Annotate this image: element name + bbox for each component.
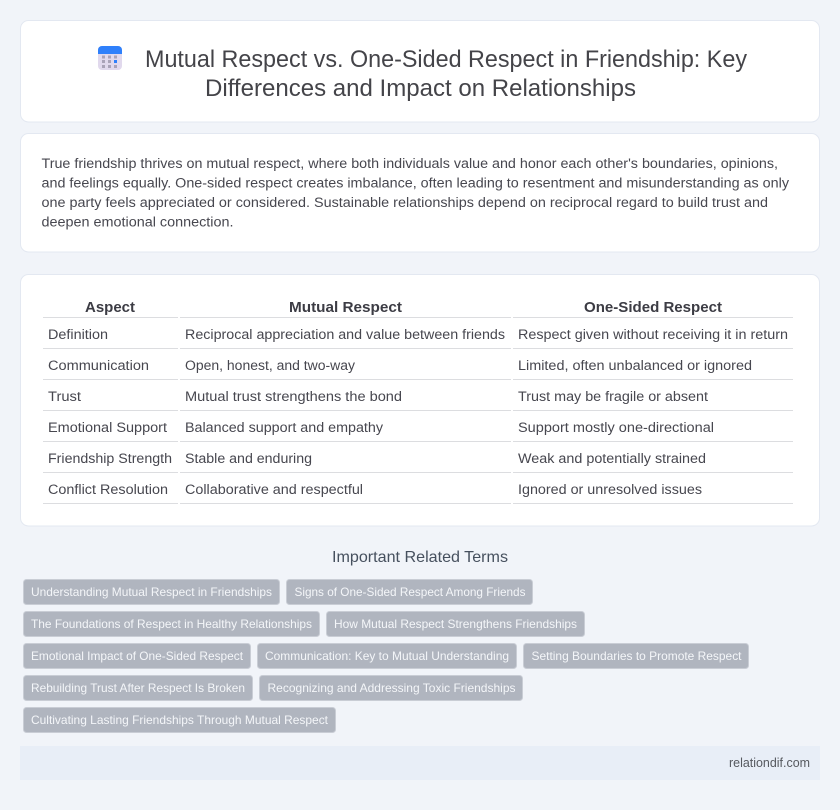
intro text block: True friendship thrives on mutual respect, where both individuals value and honor each other's boundaries, opinions,: [42, 156, 778, 172]
tag: foundations of respect: The Foundations of Respect in Healthy Relationships: [31, 617, 312, 631]
row: friendship strength: [43, 451, 793, 473]
row: trust: [43, 389, 793, 411]
row: friendship strength: Stable and enduring: [185, 451, 312, 467]
table header row: One-Sided Respect: [584, 300, 722, 316]
heading: important related terms: Important Related Terms: [332, 549, 508, 566]
row: emotional support: Balanced support and empathy: [185, 420, 384, 436]
tag: rebuilding trust: Rebuilding Trust After Respect Is Broken: [31, 681, 245, 695]
footer: relationdif.com: [729, 756, 810, 770]
tag: setting boundaries: Setting Boundaries to Promote Respect: [532, 649, 742, 663]
title: Mutual Respect vs. One-Sided Respect in Friendship: Key: [145, 46, 747, 73]
panel: comparison table: [20, 274, 820, 526]
row: emotional support: [43, 420, 793, 442]
tag: communication: Communication: Key to Mutual Understanding: [265, 649, 509, 663]
footer: [20, 746, 820, 780]
row: conflict resolution: Collaborative and respectful: [185, 482, 363, 498]
tag: cultivating lasting friendships: Cultivating Lasting Friendships Through Mutual Respect: [31, 713, 329, 727]
intro text block: deepen emotional connection.: [42, 214, 234, 230]
tag: signs of one-sided respect: Signs of One-Sided Respect Among Friends: [294, 585, 526, 599]
icon: calendar: [98, 46, 122, 70]
row: definition: Respect given without receiving it in return: [518, 327, 788, 343]
tag: how mutual respect strengthens: [326, 612, 584, 636]
tag: toxic friendships: Recognizing and Addressing Toxic Friendships: [268, 681, 516, 695]
row: emotional support: Support mostly one-directional: [518, 420, 714, 436]
tag: understanding mutual respect: Understanding Mutual Respect in Friendships: [31, 585, 272, 599]
title: [145, 46, 747, 102]
row: friendship strength: Weak and potentially strained: [518, 451, 706, 467]
table header row: Aspect: [85, 300, 135, 316]
row: conflict resolution: Conflict Resolution: [48, 482, 168, 498]
tag: understanding mutual respect: [24, 580, 280, 604]
row: definition: Reciprocal appreciation and value between friends: [185, 327, 505, 343]
panel: introduction: [20, 134, 820, 252]
intro text block: one party feels appreciated or considered. Sustainable relationships depend on reciprocal regard to build trust and: [42, 195, 768, 211]
tag: emotional impact: [24, 644, 250, 668]
row: definition: Definition: [48, 327, 108, 343]
row: communication: Open, honest, and two-way: [185, 358, 356, 374]
row: communication: Communication: [48, 358, 149, 374]
intro text block: and feelings equally. One-sided respect creates imbalance, often leading to resentment and misunderstanding as only: [42, 176, 790, 192]
tag: toxic friendships: [260, 676, 522, 700]
tag: communication: [258, 644, 516, 668]
row: trust: Trust: [48, 389, 81, 405]
row: conflict resolution: Ignored or unresolved issues: [518, 482, 702, 498]
tag: signs of one-sided respect: [286, 580, 532, 604]
row: conflict resolution: [43, 482, 793, 504]
tag: how mutual respect strengthens: How Mutual Respect Strengthens Friendships: [334, 617, 577, 631]
row: trust: Mutual trust strengthens the bond: [185, 389, 402, 405]
tag: rebuilding trust: [24, 676, 252, 700]
row: definition: [43, 327, 793, 349]
row: communication: Limited, often unbalanced or ignored: [518, 358, 752, 374]
tag: setting boundaries: [524, 644, 748, 668]
table header row: Mutual Respect: [289, 300, 402, 316]
row: emotional support: Emotional Support: [48, 420, 167, 436]
table header row: [43, 300, 793, 318]
intro text block: [42, 156, 790, 230]
tag: emotional impact: Emotional Impact of One-Sided Respect: [31, 649, 244, 663]
panel: header: [20, 20, 820, 122]
title: Differences and Impact on Relationships: [205, 75, 636, 102]
row: communication: [43, 358, 793, 380]
row: friendship strength: Friendship Strength: [48, 451, 172, 467]
panel: related term tags: [24, 580, 748, 732]
row: trust: Trust may be fragile or absent: [518, 389, 708, 405]
tag: cultivating lasting friendships: [24, 708, 336, 732]
tag: foundations of respect: [24, 612, 320, 636]
